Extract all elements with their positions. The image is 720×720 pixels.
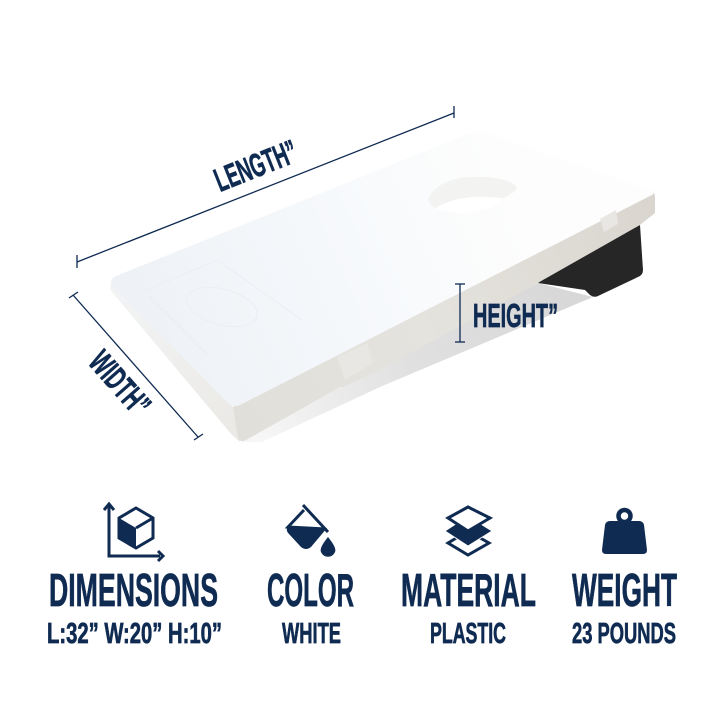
spec: dimensions [47, 504, 222, 650]
hinge notches [337, 210, 618, 380]
value: PLASTIC [430, 618, 506, 650]
heading: MATERIAL [401, 564, 536, 616]
length label: LENGTH” [209, 132, 303, 199]
icon: kettle weight [602, 510, 647, 554]
board left side [110, 282, 240, 442]
board shadow [240, 283, 593, 442]
spec: weight [572, 510, 677, 650]
icon: cube on axes [104, 504, 163, 561]
width label: WIDTH” [82, 343, 158, 423]
value: L:32” W:20” H:10” [47, 618, 222, 650]
heading: COLOR [267, 564, 354, 616]
height label: HEIGHT” [473, 297, 558, 334]
spec: material [401, 507, 536, 650]
black folding leg [538, 225, 643, 297]
board front side [233, 192, 655, 441]
icon: paint bucket and drop [287, 505, 335, 557]
length dimension line [77, 106, 454, 268]
cornhole board [110, 131, 655, 442]
spec: color [267, 505, 354, 650]
hole in the board [428, 177, 517, 213]
width dimension line [69, 292, 203, 440]
embossed logo area [135, 260, 302, 355]
heading: DIMENSIONS [49, 564, 218, 616]
height dimension line [455, 284, 465, 342]
board top surface [111, 131, 654, 406]
icon: stacked layers [445, 507, 492, 555]
value: WHITE [282, 618, 341, 650]
